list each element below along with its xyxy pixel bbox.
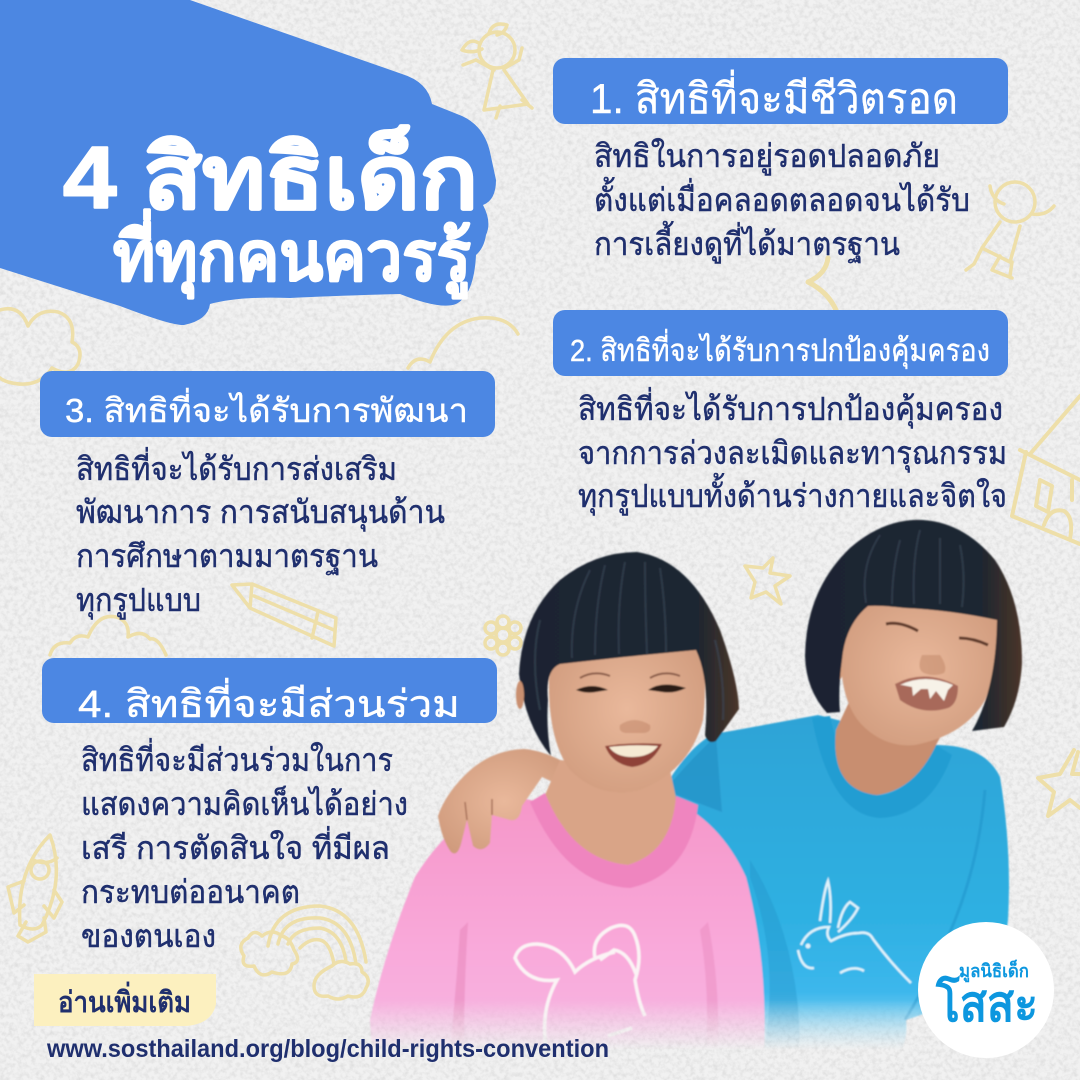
title panel (0, 0, 496, 325)
body text 4: สิทธิที่จะมีส่วนร่วมในการ (81, 738, 393, 778)
body text 3: ทุกรูปแบบ (76, 582, 201, 620)
icon: girl doodle (462, 24, 532, 118)
icon: arc (408, 318, 518, 368)
body text 2: สิทธิที่จะได้รับการปกป้องคุ้มครอง (578, 387, 1003, 429)
heading bar 1: 1. สิทธิที่จะมีชีวิตรอด (590, 70, 958, 122)
icon: pencil (232, 584, 336, 646)
logo (918, 922, 1054, 1058)
logo big text: โสสะ (935, 974, 1038, 1032)
panel: right 2 (553, 310, 1008, 516)
icon: right star (1038, 750, 1080, 816)
body text 2: ทุกรูปแบบทั้งด้านร่างกายและจิตใจ (578, 473, 1007, 516)
body text 3: การศึกษาตามมาตรฐาน (76, 538, 378, 576)
photo: two smiling children (370, 520, 1022, 1052)
heading bar 3: 3. สิทธิที่จะได้รับการพัฒนา (65, 388, 468, 429)
body text 3: สิทธิที่จะได้รับการส่งเสริม (76, 447, 397, 487)
right child body in blue shirt (664, 715, 1009, 1052)
icon: boy doodle (966, 182, 1054, 278)
body text 4: แสดงความคิดเห็นได้อย่าง (81, 785, 408, 822)
icon: rocket (8, 835, 62, 942)
title line 1: 4 สิทธิเด็ก (63, 124, 478, 227)
icon: crescent (808, 258, 836, 310)
icon: star (745, 558, 790, 604)
logo small text: มูลนิธิเด็ก (959, 959, 1029, 983)
panel: left 4 (42, 658, 497, 954)
title line 2: ที่ทุกคนควรรู้ (113, 208, 471, 300)
body text 4 (81, 738, 408, 954)
title background shape (0, 0, 496, 325)
left child body in pink shirt (370, 795, 765, 1052)
arm around shoulder (438, 749, 570, 854)
icon: cloud (0, 309, 80, 384)
icon: small cloud (50, 616, 166, 655)
body text 1: ตั้งแต่เมื่อคลอดตลอดจนได้รับ (594, 177, 970, 218)
heading bar 3 (40, 371, 495, 437)
body text 4: ของตนเอง (81, 918, 216, 954)
body text 1 (594, 138, 970, 264)
body text 1: การเลี้ยงดูที่ได้มาตรฐาน (594, 221, 900, 264)
url: www.sosthailand.org/blog/child-rights-convention (46, 1035, 609, 1063)
heading bar 2 (553, 310, 1008, 376)
icon: flower (485, 616, 521, 655)
body text 3: พัฒนาการ การสนับสนุนด้าน (76, 494, 445, 532)
icon: house (1012, 396, 1080, 544)
icon: rainbow (241, 906, 368, 999)
panel: right 1 (553, 58, 1008, 264)
heading bar 4 (42, 658, 497, 726)
right child head (805, 520, 1022, 795)
heading bar 2: 2. สิทธิที่จะได้รับการปกป้องคุ้มครอง (570, 329, 990, 370)
read more badge: อ่านเพิ่มเติม (58, 981, 191, 1019)
heading bar 4: 4. สิทธิที่จะมีส่วนร่วม (78, 678, 460, 726)
body text 2: จากการล่วงละเมิดและทารุณกรรม (578, 435, 1007, 473)
heading bar 1 (553, 58, 1008, 124)
body text 1: สิทธิในการอยู่รอดปลอดภัย (594, 138, 940, 176)
body text 4: กระทบต่ออนาคต (81, 874, 300, 910)
left child head (516, 552, 739, 888)
body text 2 (578, 387, 1007, 516)
body text 3 (76, 447, 445, 620)
read more badge (34, 974, 216, 1026)
body text 4: เสรี การตัดสินใจ ที่มีผล (81, 826, 390, 866)
panel: left 3 (40, 371, 495, 620)
